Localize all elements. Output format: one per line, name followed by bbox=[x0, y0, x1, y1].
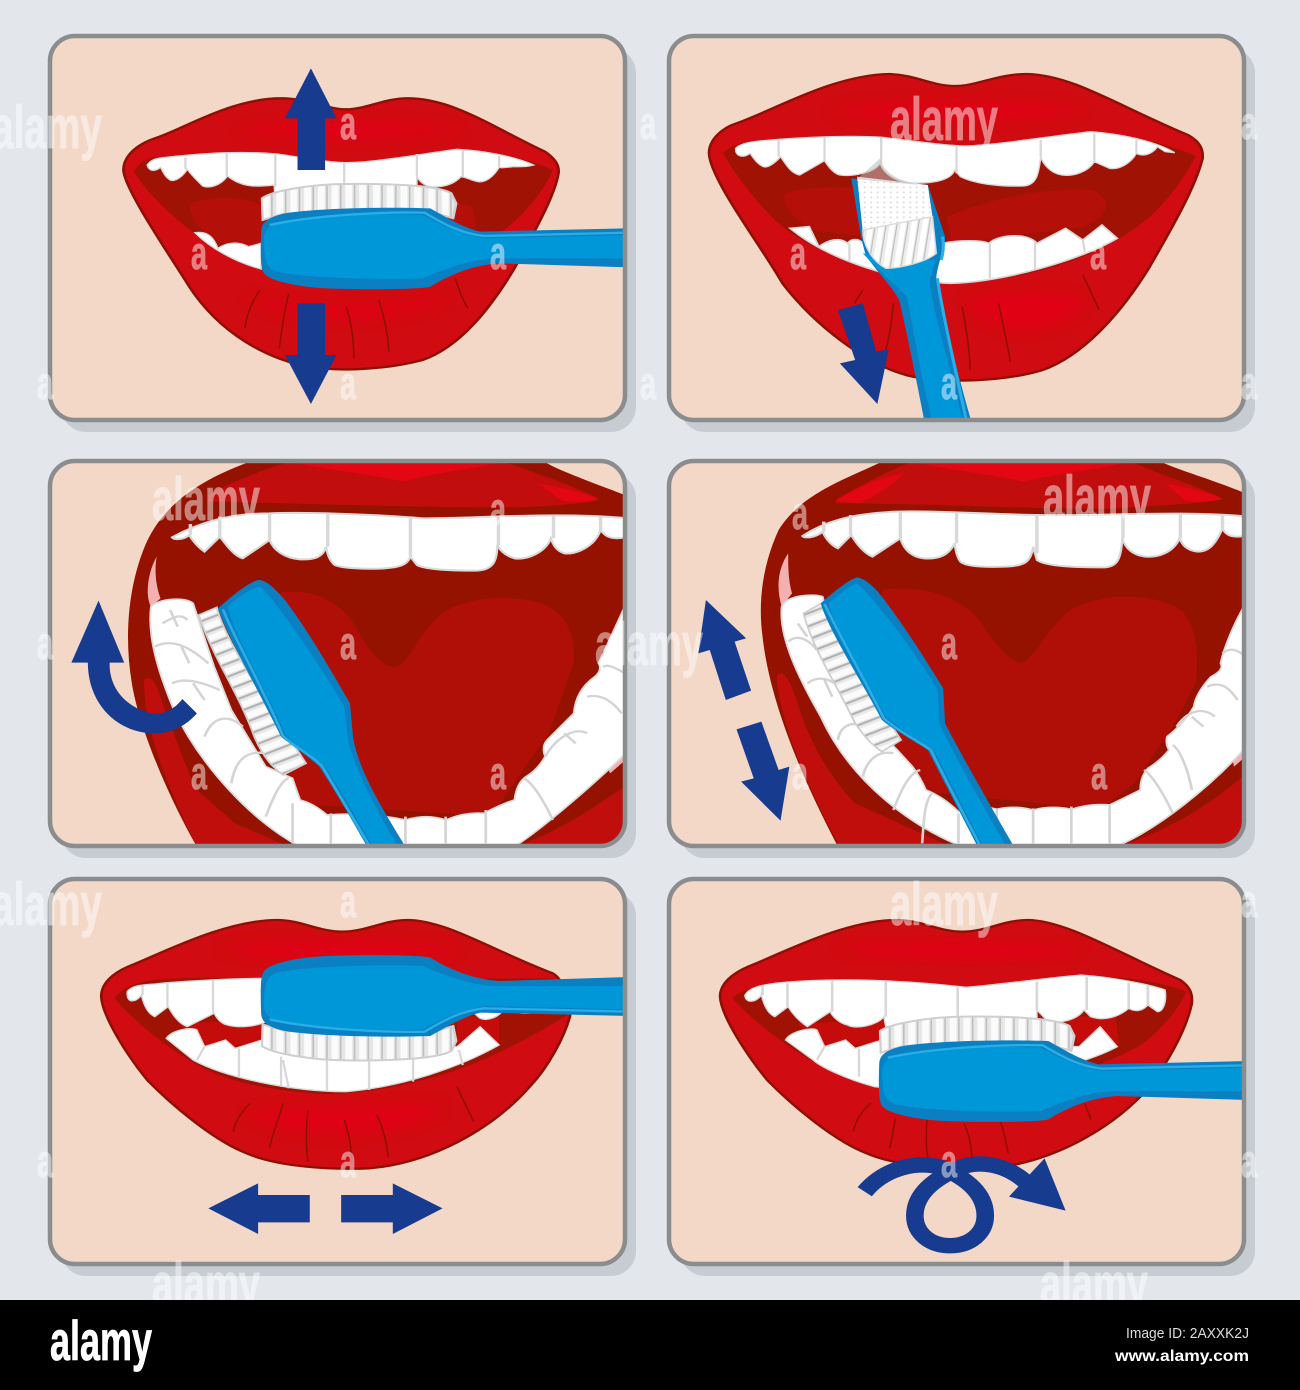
open mouth bbox=[761, 460, 1249, 847]
watermarks: a bbox=[1241, 357, 1257, 409]
watermarks: a bbox=[1241, 97, 1257, 149]
molar details bbox=[788, 623, 1245, 843]
watermarks: a bbox=[790, 227, 806, 279]
watermarks: a bbox=[1091, 747, 1107, 799]
watermarks: a bbox=[490, 227, 506, 279]
watermarks: a bbox=[941, 1135, 957, 1187]
gums bbox=[148, 557, 625, 773]
bristles bbox=[262, 184, 456, 220]
watermarks: a bbox=[340, 617, 356, 669]
lower teeth bbox=[166, 1027, 499, 1092]
upper teeth bbox=[127, 978, 537, 1027]
lip creases bbox=[245, 278, 468, 358]
watermarks: a bbox=[792, 747, 808, 799]
lower lip bbox=[777, 673, 1249, 847]
tongue bbox=[277, 592, 574, 817]
watermarks: a bbox=[1241, 875, 1257, 927]
circular arrow bbox=[865, 1158, 1066, 1246]
panel: step 2 flick down on front teeth bbox=[669, 36, 1255, 432]
arrow down-right bbox=[737, 722, 789, 821]
arrow left bbox=[208, 1183, 310, 1234]
watermarks: a bbox=[490, 483, 506, 535]
watermarks: alamy bbox=[890, 86, 998, 153]
watermarks: a bbox=[792, 487, 808, 539]
bristles bbox=[262, 1024, 456, 1060]
watermarks: a bbox=[640, 97, 656, 149]
panel: step 4 inner teeth up and down bbox=[669, 460, 1255, 858]
lips bbox=[123, 98, 559, 369]
lower teeth bbox=[781, 595, 1249, 847]
watermarks: a bbox=[37, 1135, 53, 1187]
upper teeth bbox=[146, 148, 536, 192]
watermarks: a bbox=[191, 227, 207, 279]
footer logo: alamy bbox=[50, 1309, 152, 1372]
arrow down bbox=[285, 303, 337, 404]
watermarks: alamy bbox=[1043, 464, 1151, 531]
watermarks: a bbox=[490, 747, 506, 799]
toothbrush bbox=[879, 1040, 1247, 1122]
watermarks: a bbox=[640, 357, 656, 409]
upper teeth bbox=[172, 513, 629, 571]
toothbrush bbox=[218, 580, 405, 847]
arrow up bbox=[285, 68, 337, 170]
watermarks: a bbox=[191, 747, 207, 799]
toothbrush bbox=[821, 577, 1014, 847]
gums bbox=[779, 553, 1245, 767]
mouth interior bbox=[115, 978, 570, 1094]
toothbrush bristles bbox=[199, 607, 306, 775]
toothbrush bbox=[851, 177, 971, 419]
watermarks: alamy bbox=[152, 1251, 260, 1318]
arrow right bbox=[341, 1183, 443, 1234]
lower teeth bbox=[150, 597, 629, 847]
footer bar bbox=[0, 1300, 1300, 1390]
arrow up-left bbox=[698, 600, 751, 700]
panel: step 6 circular motion on front teeth bbox=[669, 879, 1255, 1276]
lip creases bbox=[853, 1103, 1091, 1162]
lower teeth bbox=[786, 1027, 1117, 1089]
curved arrow bbox=[71, 601, 197, 733]
watermarks: a bbox=[340, 357, 356, 409]
watermarks: a bbox=[37, 617, 53, 669]
toothbrush bbox=[261, 955, 629, 1037]
arrow down-right bbox=[838, 303, 889, 404]
watermarks: a bbox=[1090, 227, 1106, 279]
upper teeth bbox=[802, 511, 1249, 567]
mouth interior bbox=[733, 975, 1186, 1097]
lower lip bbox=[144, 678, 629, 847]
bristle shadow on teeth bbox=[857, 158, 920, 185]
watermarks: a bbox=[1241, 1135, 1257, 1187]
lips bbox=[720, 920, 1192, 1169]
lower teeth bbox=[790, 225, 1117, 283]
panel: step 3 inner teeth rolling bbox=[50, 460, 636, 858]
lips bbox=[709, 74, 1203, 381]
watermarks: a bbox=[37, 357, 53, 409]
tongue bbox=[882, 588, 1197, 810]
watermarks: alamy bbox=[152, 466, 260, 533]
mouth interior bbox=[134, 151, 553, 270]
watermarks: alamy bbox=[595, 611, 703, 678]
watermarks: alamy bbox=[890, 871, 998, 938]
watermarks: a bbox=[340, 1135, 356, 1187]
upper teeth bbox=[745, 975, 1166, 1027]
upper teeth bbox=[736, 132, 1175, 186]
watermarks: a bbox=[340, 97, 356, 149]
lips bbox=[101, 920, 570, 1169]
image id: Image ID: 2AXXK2J bbox=[1126, 1325, 1249, 1342]
panel: step 5 chewing surfaces side to side bbox=[50, 879, 636, 1276]
watermarks: a bbox=[941, 357, 957, 409]
lower teeth bbox=[195, 232, 261, 269]
watermarks: a bbox=[340, 875, 356, 927]
toothbrush bbox=[261, 208, 629, 289]
bristles bbox=[880, 1017, 1074, 1053]
toothbrush bristles bbox=[803, 603, 901, 752]
lip creases bbox=[233, 1087, 474, 1163]
lip creases bbox=[855, 275, 1099, 370]
watermarks: alamy bbox=[1040, 1251, 1148, 1318]
upper lip bbox=[836, 462, 1222, 509]
open mouth bbox=[128, 460, 629, 847]
upper lip bbox=[208, 462, 599, 507]
website: www.alamy.com bbox=[1114, 1348, 1249, 1365]
panel: step 1 up and down on outer upper teeth bbox=[50, 36, 636, 432]
watermarks: a bbox=[941, 617, 957, 669]
molar details bbox=[155, 610, 625, 843]
mouth interior bbox=[723, 132, 1196, 283]
